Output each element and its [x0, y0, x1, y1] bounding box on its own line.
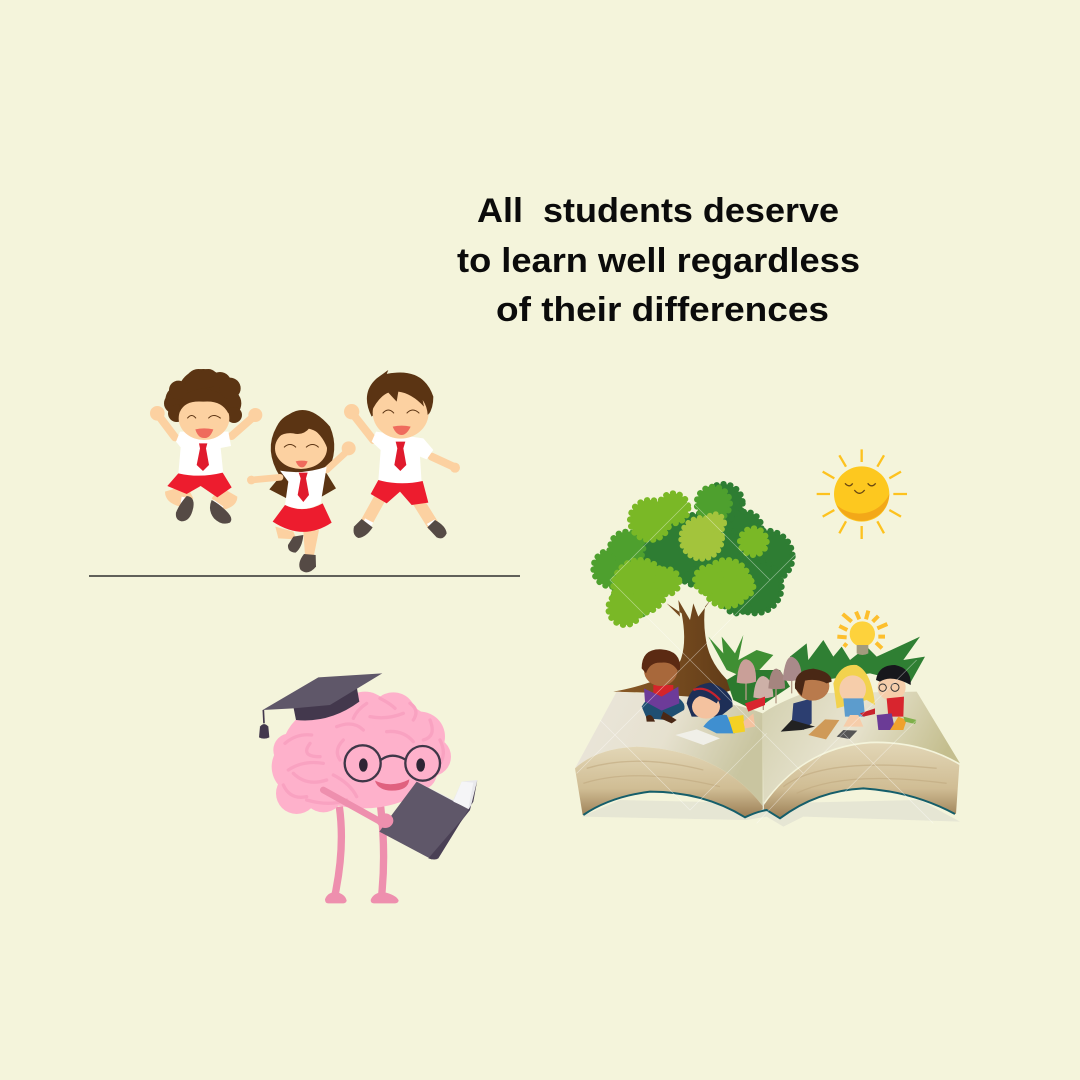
- illustration: children on open book under tree: [575, 449, 960, 827]
- child: dark-haired boy kneeling: [781, 669, 857, 739]
- book shadow: [582, 800, 960, 827]
- child: girl with red skirt: [247, 410, 356, 572]
- glasses and face: [345, 745, 440, 791]
- child: blonde girl: [833, 665, 875, 727]
- left page edges: [575, 747, 763, 817]
- illustration: brain with graduation cap reading a book: [259, 673, 477, 903]
- light foliage: [608, 493, 767, 625]
- title: All students deserve: [477, 192, 839, 230]
- graduation cap: [259, 673, 382, 739]
- dark foliage: [640, 484, 793, 613]
- title: of their differences: [496, 291, 829, 329]
- brain arm: [323, 790, 383, 823]
- light bulb: [837, 611, 887, 655]
- hand on book: [377, 813, 393, 828]
- mid foliage: [593, 487, 730, 617]
- tree: [593, 484, 793, 703]
- right page: [763, 692, 960, 803]
- child: girl lying down with blue hair: [675, 683, 765, 745]
- open book: [379, 780, 477, 859]
- highlight foliage: [681, 514, 724, 559]
- book cover edge: [583, 788, 955, 818]
- title: to learn well regardless: [457, 242, 860, 280]
- brain body: [272, 692, 451, 823]
- mushrooms: [737, 657, 802, 710]
- sun: [817, 449, 907, 539]
- child: boy reading purple book: [642, 649, 685, 723]
- left page: [575, 692, 763, 806]
- right page edges: [764, 743, 959, 818]
- illustration: jumping school children: [150, 369, 460, 572]
- tree trunk: [613, 597, 737, 703]
- child: boy with side-swept hair: [344, 370, 460, 538]
- grass and plants: [708, 635, 925, 707]
- divider line under children: [89, 575, 520, 577]
- child: boy with glasses: [876, 665, 917, 730]
- title: [457, 192, 860, 329]
- open book: [575, 692, 960, 827]
- child: curly-haired boy: [150, 369, 262, 524]
- brain legs: [325, 807, 399, 903]
